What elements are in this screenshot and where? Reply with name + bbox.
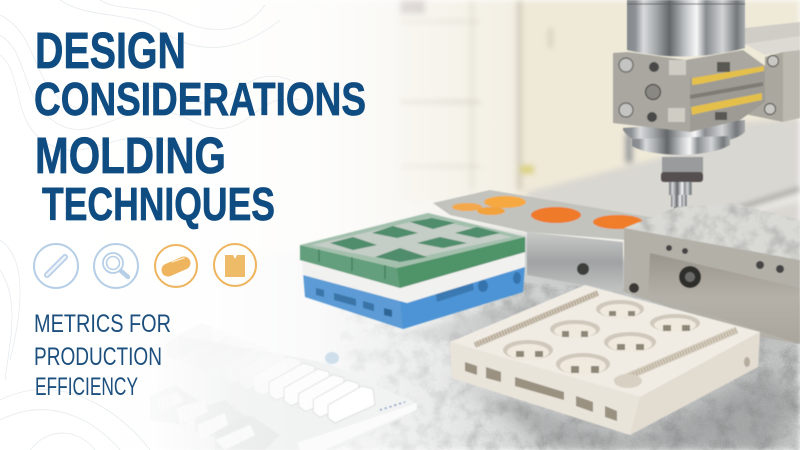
icon: magnifier in circle bbox=[94, 244, 138, 288]
title: Design Considerations: CONSIDERATIONS bbox=[34, 73, 366, 125]
head block bbox=[613, 50, 765, 132]
comb upper keys bbox=[166, 323, 375, 423]
panel: green white blue stacked mold bbox=[300, 213, 525, 329]
blue base bbox=[303, 262, 525, 329]
subtitle: Metrics for production efficiency: EFFICIENCY bbox=[35, 373, 138, 401]
title: Design Considerations bbox=[34, 22, 366, 125]
title: Molding Techniques: TECHNIQUES bbox=[42, 178, 275, 230]
panel: white comb part faded on the left bbox=[150, 323, 417, 450]
collet and tool bbox=[662, 157, 703, 173]
icon: capsule in circle bbox=[155, 245, 197, 287]
subtitle: Metrics for production efficiency bbox=[34, 310, 171, 401]
bolts and details bbox=[619, 58, 633, 72]
comb lower keys bbox=[150, 385, 280, 450]
panel: aluminium plate with orange inserts bbox=[433, 190, 655, 292]
icon: box in circle bbox=[214, 244, 256, 286]
icon row bbox=[34, 244, 256, 288]
orange inserts bbox=[452, 203, 482, 211]
background: faint topographic contour lines bbox=[0, 0, 300, 450]
green top bbox=[300, 213, 525, 268]
green wells bbox=[330, 237, 377, 250]
side arm bbox=[740, 22, 800, 122]
comb channels bbox=[475, 293, 598, 345]
comb blue marks bbox=[380, 402, 405, 410]
subtitle: Metrics for production efficiency: PRODUCTION bbox=[34, 343, 162, 371]
title: Design Considerations: DESIGN bbox=[35, 22, 186, 79]
title: Molding Techniques bbox=[35, 127, 275, 230]
side openings bbox=[465, 362, 617, 421]
icon: small blue smudge on floor bbox=[325, 352, 339, 364]
title: Molding Techniques: MOLDING bbox=[35, 127, 226, 184]
mold wells bbox=[503, 300, 700, 375]
comb base plate bbox=[150, 330, 417, 450]
subtitle: Metrics for production efficiency: METRICS FOR bbox=[34, 310, 171, 338]
panel: CNC spindle machine bbox=[613, 0, 800, 217]
white layer bbox=[302, 250, 525, 303]
spindle cylinder bbox=[627, 0, 745, 57]
yellow rails bbox=[692, 66, 764, 85]
blue base openings bbox=[316, 288, 324, 297]
panel: floor speckle and mold shadows bbox=[340, 270, 800, 450]
panel: white ceramic mold bbox=[450, 285, 760, 435]
green face bbox=[300, 237, 525, 288]
icon: pin in circle bbox=[34, 244, 78, 288]
well pins bbox=[516, 311, 690, 373]
panel: large steel mold block bbox=[620, 200, 800, 344]
lower chrome rings bbox=[623, 120, 745, 144]
